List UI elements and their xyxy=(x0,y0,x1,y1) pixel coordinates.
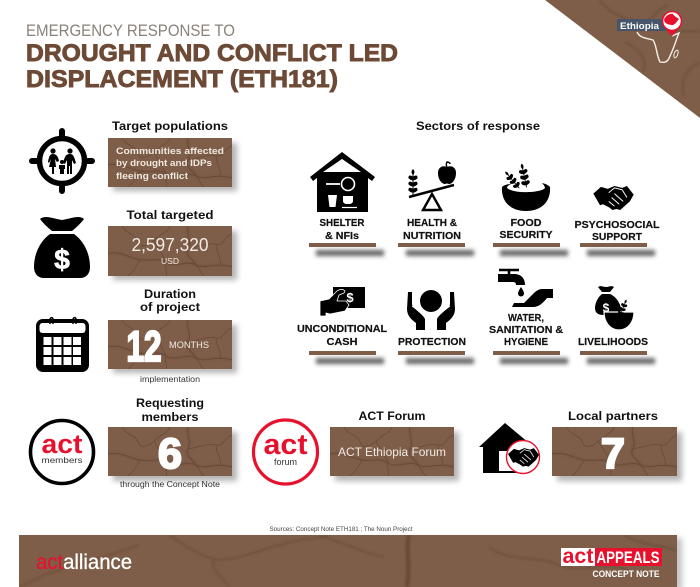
sources: Sources: Concept Note ETH181 ; The Noun Project xyxy=(270,527,413,533)
description: fleeing conflict xyxy=(116,170,188,181)
bar xyxy=(398,351,465,355)
badge: ACT Appeals: act xyxy=(562,545,594,568)
shadow xyxy=(24,538,682,587)
number 7: 7 xyxy=(601,430,625,478)
texture box xyxy=(108,320,232,369)
Africa outline xyxy=(637,32,679,62)
shadow xyxy=(500,358,568,364)
label xyxy=(500,217,552,241)
heading xyxy=(140,287,200,314)
icon: calendar xyxy=(36,318,89,372)
shadow xyxy=(587,250,655,256)
logo: act forum: forum xyxy=(274,457,297,467)
bar xyxy=(493,351,560,355)
description xyxy=(116,145,224,181)
label xyxy=(320,217,365,242)
forum name: ACT Ethiopia Forum xyxy=(338,445,446,459)
icon: house with handshake xyxy=(479,423,540,474)
label: & NFIs xyxy=(325,230,359,242)
sector: shelter xyxy=(309,152,384,256)
label: FOOD xyxy=(510,217,542,229)
label: SANITATION & xyxy=(489,324,563,336)
number 6: 6 xyxy=(158,430,182,478)
icon: money bag xyxy=(34,217,90,278)
amount: 2,597,320 xyxy=(132,234,208,255)
heading: Requesting xyxy=(136,396,204,410)
panel: local partners xyxy=(479,409,682,481)
logo: act members xyxy=(30,420,94,484)
logo: ACT Alliance: actalliance xyxy=(36,551,132,574)
label: CASH xyxy=(326,336,358,348)
title line one: DROUGHT AND CONFLICT LED xyxy=(26,40,398,67)
label: UNCONDITIONAL xyxy=(297,323,388,335)
texture box xyxy=(108,138,232,187)
label xyxy=(297,323,388,348)
icon: money bag and bowl: $ xyxy=(603,301,610,315)
shadow xyxy=(557,432,682,481)
bar xyxy=(398,243,465,247)
shadow xyxy=(113,432,237,481)
icon: hand holding banknote: $ xyxy=(346,290,354,305)
label xyxy=(574,219,660,243)
panel: requesting members xyxy=(30,396,237,489)
label: Ethiopia: Ethiopia xyxy=(620,21,660,32)
bar xyxy=(309,243,376,247)
icon: family in target xyxy=(32,131,92,191)
heading: Duration xyxy=(144,287,196,301)
heading: Local partners xyxy=(568,409,658,423)
sector: health xyxy=(398,162,474,256)
shadow xyxy=(406,250,474,256)
icon: scale with apple and wheat xyxy=(408,162,456,210)
number 12: 12 xyxy=(126,323,162,371)
logo: act members: act xyxy=(42,429,83,459)
icon: money bag: $ xyxy=(54,244,70,275)
label: NUTRITION xyxy=(403,230,461,242)
texture box xyxy=(108,427,232,476)
panel: target populations xyxy=(32,119,237,191)
shadow xyxy=(316,358,384,364)
title xyxy=(26,21,398,93)
icon: handshake xyxy=(593,186,634,210)
unit: MONTHS xyxy=(169,340,209,351)
label: SHELTER xyxy=(320,217,365,229)
label: Ethiopia xyxy=(617,19,667,32)
title line two: DISPLACEMENT (ETH181) xyxy=(26,66,338,93)
label xyxy=(489,312,563,348)
label: SUPPORT xyxy=(592,231,643,243)
title kicker: EMERGENCY RESPONSE TO xyxy=(26,21,235,40)
icon: tap and hand xyxy=(498,270,553,307)
label: PROTECTION xyxy=(398,336,466,348)
bar xyxy=(580,243,647,247)
heading: Total targeted xyxy=(126,208,214,222)
panel: sectors of response xyxy=(297,119,660,364)
shadow xyxy=(500,250,568,256)
shadow xyxy=(316,250,384,256)
label xyxy=(403,217,461,242)
label: SECURITY xyxy=(500,229,552,241)
icon: house with kitchen items xyxy=(310,152,375,212)
shadow xyxy=(587,358,655,364)
label: PSYCHOSOCIAL xyxy=(574,219,660,231)
logo: act members: members xyxy=(42,455,82,465)
shadow xyxy=(113,231,237,280)
sector: psychosocial support xyxy=(574,186,660,256)
badge: ACT Appeals: APPEALS xyxy=(596,549,660,567)
sector: unconditional cash xyxy=(297,287,388,364)
description: Communities affected xyxy=(116,145,224,156)
texture box xyxy=(330,427,454,476)
Madagascar xyxy=(673,50,679,58)
texture xyxy=(19,535,677,587)
shadow xyxy=(335,432,459,481)
sector: protection xyxy=(398,290,474,364)
currency: USD xyxy=(161,256,179,266)
heading: of project xyxy=(140,300,200,314)
texture box xyxy=(108,226,232,276)
heading: members xyxy=(142,410,199,424)
heading xyxy=(136,396,204,424)
heading: Target populations xyxy=(112,119,228,133)
panel: total targeted xyxy=(34,208,237,280)
label: LIVELIHOODS xyxy=(578,336,648,348)
bar xyxy=(309,351,376,355)
corner panel: country locator xyxy=(545,0,700,118)
sector: food security xyxy=(493,163,568,256)
sector: livelihoods xyxy=(578,286,655,364)
label: WATER, xyxy=(508,312,544,324)
panel: duration xyxy=(36,287,237,384)
description: by drought and IDPs xyxy=(116,157,212,168)
badge: ACT Appeals xyxy=(561,545,662,580)
texture box xyxy=(552,427,677,476)
shadow xyxy=(113,143,237,191)
footer band xyxy=(19,535,682,587)
map pin xyxy=(662,12,682,36)
label: HEALTH & xyxy=(407,217,457,229)
shadow xyxy=(406,358,474,364)
icon: hands around person xyxy=(407,290,455,330)
label: HYGIENE xyxy=(504,336,548,348)
note: implementation xyxy=(140,375,200,384)
note: through the Concept Note xyxy=(120,480,221,489)
sector: water, sanitation and hygiene xyxy=(489,270,568,364)
bar xyxy=(493,243,560,247)
logo: act forum: act xyxy=(264,429,308,461)
heading: Sectors of response xyxy=(416,119,540,133)
textured corner triangle xyxy=(545,0,700,118)
heading: ACT Forum xyxy=(358,409,426,423)
badge: ACT Appeals: CONCEPT NOTE xyxy=(592,569,660,580)
panel: ACT forum xyxy=(254,409,459,484)
shadow xyxy=(113,325,237,373)
icon: bowl with wheat xyxy=(502,163,550,211)
bar xyxy=(580,351,647,355)
logo: act forum xyxy=(254,420,318,484)
